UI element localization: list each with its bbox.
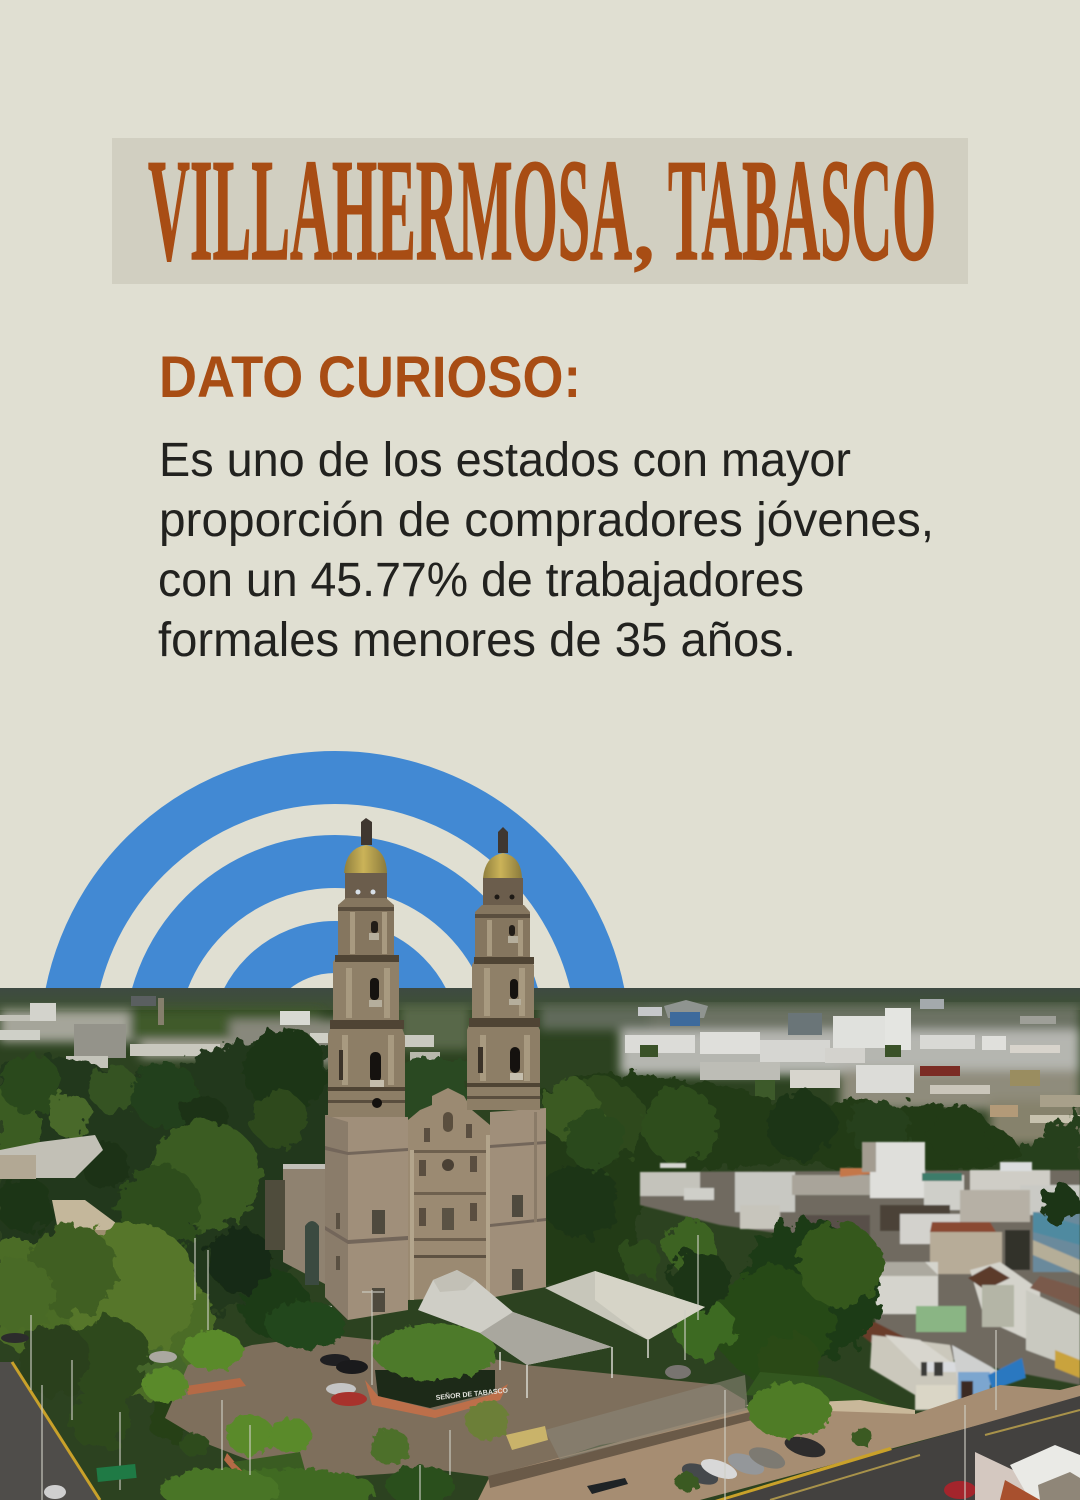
dark tree masses <box>0 1028 1080 1340</box>
right tower <box>467 827 540 1110</box>
planter <box>365 1380 508 1418</box>
white tents <box>418 1270 705 1398</box>
tent left <box>418 1270 612 1365</box>
sign: SEÑOR DE TABASCO <box>435 1385 509 1402</box>
small kiosk by cathedral <box>300 1304 332 1343</box>
gold dome <box>344 845 387 873</box>
big tree and right-side trees <box>620 1185 1080 1397</box>
cathedral <box>265 818 546 1320</box>
left tower <box>328 818 405 1117</box>
body text: proporción de compradores jóvenes, <box>159 494 934 547</box>
neighbourhood buildings right <box>640 1142 1080 1410</box>
low wall <box>745 1400 915 1416</box>
street lamps and poles <box>31 1235 996 1500</box>
body text: formales menores de 35 años. <box>158 614 796 667</box>
bright tree canopy lower left <box>0 1222 309 1450</box>
body text <box>158 434 934 667</box>
mid-left houses <box>0 1135 120 1250</box>
lawn <box>745 1372 890 1405</box>
gold dome <box>483 853 522 878</box>
cars <box>1 1333 976 1499</box>
central facade <box>408 1088 490 1300</box>
title banner <box>112 129 968 291</box>
kiosk <box>506 1426 548 1450</box>
title: , <box>634 186 654 277</box>
planter trees lower left <box>143 1301 873 1500</box>
body text: con un 45.77% de trabajadores <box>158 554 804 607</box>
building bottom right <box>975 1445 1080 1500</box>
road markings <box>770 1410 1080 1500</box>
tent right <box>545 1271 705 1340</box>
concentric blue arcs <box>46 751 624 988</box>
spire <box>361 818 372 845</box>
steps and fence <box>488 1375 752 1488</box>
right tower base <box>490 1108 546 1298</box>
body text: Es uno de los estados con mayor <box>159 434 851 487</box>
spire <box>498 827 508 853</box>
aerial photo of the city <box>0 818 1080 1500</box>
green road sign <box>96 1464 137 1482</box>
street right <box>715 1396 1080 1500</box>
distant horizon and city <box>0 988 1080 1500</box>
heading: dato curioso: DATO CURIOSO: <box>159 345 581 410</box>
street left <box>0 1362 100 1500</box>
plaza pavement <box>165 1335 745 1480</box>
side annex <box>265 1164 325 1285</box>
sidewalk <box>478 1385 1080 1500</box>
left tower base <box>325 1115 408 1320</box>
solar panel <box>587 1478 628 1494</box>
round tree in plaza <box>365 1324 509 1418</box>
road kerb left <box>12 1362 100 1500</box>
road kerb <box>715 1447 892 1500</box>
